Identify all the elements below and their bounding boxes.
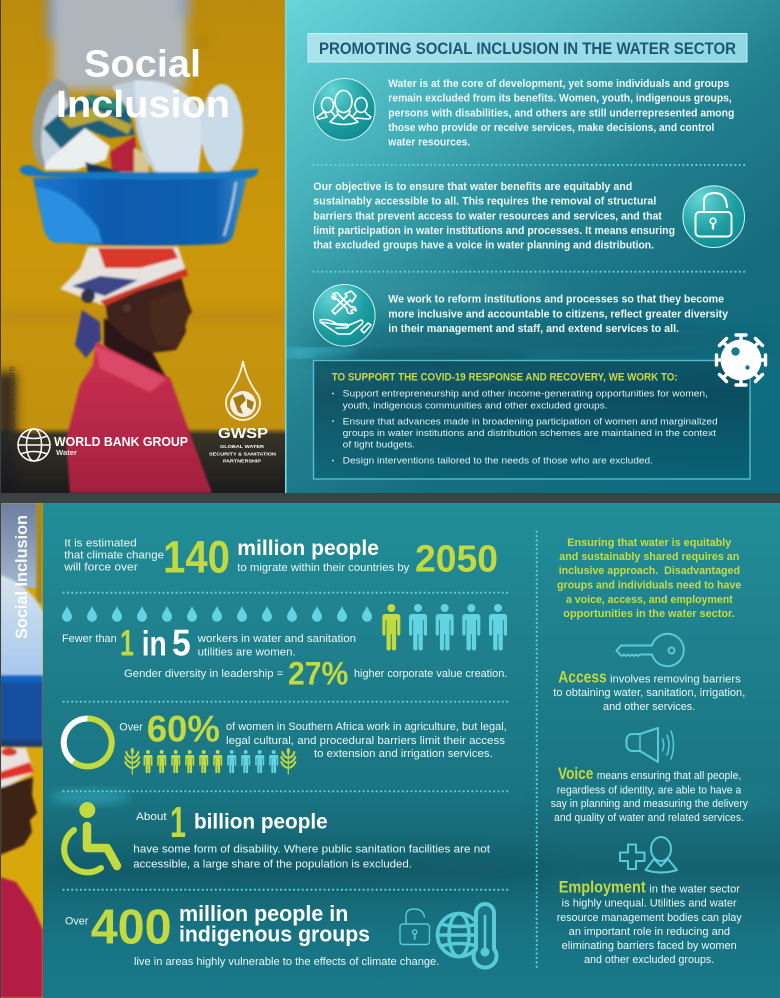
- text: ensuring water: inclusive approach. Disadvantaged: [559, 565, 740, 577]
- stat: 1 in 5: Fewer than: [62, 633, 117, 645]
- stat: 60 percent: 60%: [147, 709, 220, 750]
- icon: tools in hand: [314, 284, 375, 346]
- strip: cropped photo with vertical title: [0, 503, 43, 998]
- title: Social Inclusion: Inclusion: [56, 84, 230, 126]
- icon: plus and person: [620, 837, 677, 872]
- text: water is at the core: Water is at the core of development, yet some individuals and groups: [388, 78, 729, 90]
- white cup: [45, 128, 110, 170]
- text: reform institutions: more inclusive and accountable to citizens, reflect greater diversity: [388, 308, 728, 320]
- pictogram: 1 in 5 workers: [382, 604, 507, 650]
- stat: 1 billion people: [133, 798, 490, 870]
- stat: 400 million people: million people in: [179, 901, 348, 926]
- left plate: [30, 79, 72, 170]
- icon: open padlock: [683, 186, 744, 248]
- divider: vertical dots: [536, 532, 538, 971]
- icon: wheelchair: [64, 802, 117, 872]
- icon: megaphone: [626, 728, 674, 762]
- text: voice: and quality of water and related services.: [554, 812, 744, 824]
- text: public disclosure watermark: Public Disclosure: [7, 366, 18, 440]
- logo: GWSP: [209, 361, 277, 464]
- stat: 27 percent: 27%: [288, 655, 348, 691]
- stat: 1 billion people: billion people: [194, 810, 328, 833]
- callout: covid-19 response: Support entrepreneurship and other income-generating opportunities for women,: [343, 389, 708, 400]
- text: water is at the core: persons with disabilities, and others are still underrepresented among: [388, 107, 734, 119]
- title: Social Inclusion: [56, 44, 230, 126]
- stat: 140 million people: to migrate within their countries by: [237, 562, 410, 574]
- basin rim: [20, 165, 258, 180]
- donut chart: 60 percent: [64, 718, 112, 767]
- pictogram: wheat and women: [125, 748, 295, 774]
- logo: World Bank Group: Water: [56, 448, 77, 457]
- callout: covid-19 response: TO SUPPORT THE COVID-19 RESPONSE AND RECOVERY, WE WORK TO:: [332, 371, 678, 383]
- text: reform institutions: [388, 294, 728, 335]
- stat: 60 percent: [119, 709, 507, 760]
- stat: 400 million people: Over: [65, 915, 89, 927]
- stat: 60 percent: legal cultural, and procedural barriers limit their access: [226, 735, 506, 747]
- text: access: involves removing barriers: [610, 673, 741, 685]
- scarf tail: [75, 310, 101, 358]
- text: employment: eliminating barriers faced by women: [562, 940, 737, 952]
- stat: 140 million people: will force over: [63, 561, 138, 573]
- stat: 1 billion people: About: [136, 811, 167, 823]
- text: ensuring water: a voice, access, and employment: [566, 594, 733, 606]
- panel: promoting social inclusion: [278, 0, 780, 493]
- icon: key: [616, 634, 684, 666]
- stat: 1 in 5: 1: [120, 623, 134, 664]
- text: voice: say in planning and measuring the delivery: [551, 798, 749, 810]
- callout: covid-19 response: youth, indigenous communities and other excluded groups.: [343, 400, 608, 411]
- text: voice: regardless of identity, are able to have a: [557, 784, 741, 796]
- logo: GWSP: GWSP: [218, 425, 268, 442]
- stat: 1 billion people: accessible, a large share of the population is excluded.: [133, 858, 412, 870]
- text: voice: means ensuring that all people,: [597, 770, 741, 782]
- text: our objective: barriers that prevent access to water resources and services, and that: [313, 210, 662, 222]
- logo: GWSP: GLOBAL WATER: [220, 444, 265, 449]
- text: our objective: [313, 181, 675, 252]
- icon: group of people: [314, 78, 375, 140]
- logo: World Bank Group: WORLD BANK GROUP: [54, 434, 188, 449]
- stat: 400 million people: 400: [91, 900, 172, 954]
- text: employment: resource management bodies can play: [557, 912, 742, 924]
- text: water is at the core: remain excluded from its benefits. Women, youth, indigenous groups,: [388, 93, 732, 105]
- text: employment: an important role in reducing and: [569, 926, 730, 938]
- stat: 1 in 5: in: [142, 625, 167, 664]
- neck: [102, 317, 168, 378]
- text: voice: Voice: [558, 765, 593, 783]
- stat: 1 in 5: utilities are women.: [198, 647, 296, 659]
- icon: virus: [716, 335, 766, 385]
- right plate: [201, 84, 243, 174]
- text: voice: [551, 765, 749, 824]
- stat: 1 in 5: 5: [172, 623, 191, 664]
- text: ensuring water: opportunities in the water sector.: [563, 608, 735, 620]
- stat: 27 percent: [124, 655, 507, 691]
- text: our objective: that excluded groups have a voice in water planning and distribution.: [313, 240, 654, 252]
- text: employment: [557, 879, 742, 966]
- text: water is at the core: water resources.: [387, 137, 470, 149]
- text: our objective: Our objective is to ensure that water benefits are equitably and: [313, 181, 632, 193]
- stat: 1 billion people: 1: [170, 798, 186, 847]
- text: access: Access: [558, 668, 607, 686]
- dress: [66, 342, 212, 493]
- text: ensuring water: and sustainably shared requires an: [559, 551, 739, 563]
- text: employment: and other excluded groups.: [584, 954, 714, 966]
- icon: open lock: [400, 909, 430, 944]
- panel: cover photo: [0, 0, 285, 497]
- stat: 60 percent: to extension and irrigation services.: [314, 748, 493, 760]
- stat: 140 million people: 2050: [415, 539, 498, 581]
- strip: cropped photo with vertical title: Social Inclusion: [12, 515, 31, 639]
- text: employment: in the water sector: [649, 884, 740, 896]
- stat: 1 in 5: workers in water and sanitation: [197, 633, 356, 645]
- translucent bowl: [112, 81, 205, 173]
- text: water is at the core: those who provide or receive services, make decisions, and control: [388, 122, 714, 134]
- basin body: [33, 178, 247, 246]
- text: access: and other services.: [603, 701, 695, 713]
- headscarf: [60, 247, 188, 305]
- callout: covid-19 response: groups in water institutions and distribution schemes are maintained in the context: [343, 428, 716, 439]
- title: Social Inclusion: Social: [84, 44, 201, 86]
- text: water is at the core: [387, 78, 734, 149]
- heading banner: PROMOTING SOCIAL INCLUSION IN THE WATER SECTOR: [319, 40, 736, 58]
- stat: 1 billion people: have some form of disability. Where public sanitation facilities are not: [133, 844, 490, 856]
- logo: World Bank Group: [18, 429, 188, 461]
- stat: 140 million people: 140: [163, 531, 230, 582]
- panel: statistics: [40, 503, 780, 998]
- text: reform institutions: We work to reform institutions and processes so that they become: [388, 294, 724, 306]
- stat: 140 million people: [63, 531, 498, 582]
- text: ensuring water: [557, 537, 741, 620]
- callout: covid-19 response: [314, 360, 750, 479]
- stat: 400 million people: live in areas highly vulnerable to the effects of climate change.: [134, 956, 439, 968]
- stat: 140 million people: It is estimated: [64, 538, 137, 550]
- stat: 60 percent: of women in Southern Africa work in agriculture, but legal,: [226, 721, 507, 733]
- stat: 400 million people: [65, 900, 439, 968]
- colourful cloth: [43, 95, 135, 150]
- text: ensuring water: Ensuring that water is equitably: [567, 537, 731, 549]
- logo: GWSP: PARTNERSHIP: [223, 458, 261, 464]
- logo: GWSP: SECURITY & SANITATION: [209, 452, 277, 456]
- text: employment: Employment: [559, 879, 646, 897]
- text: ensuring water: groups and individuals need to have: [557, 580, 741, 592]
- text: our objective: limit participation in water institutions and processes. It means ensuring: [313, 225, 675, 237]
- text: access: [553, 668, 745, 713]
- text: employment: is highly unequal. Utilities and water: [562, 898, 737, 910]
- heading banner: [308, 34, 747, 62]
- head: [105, 272, 192, 353]
- icon: globe and thermometer: [438, 904, 496, 968]
- text: our objective: sustainably accessible to all. This requires the removal of structural: [313, 196, 656, 208]
- knot: [81, 289, 95, 303]
- icon row: water drops: [62, 606, 372, 622]
- stat: 140 million people: million people: [237, 537, 379, 560]
- text: access: to obtaining water, sanitation, irrigation,: [553, 687, 745, 699]
- stat: 27 percent: higher corporate value creation.: [354, 668, 507, 680]
- stat: 140 million people: that climate change: [64, 550, 164, 562]
- dark foot gradient: [0, 428, 285, 493]
- stat: 60 percent: Over: [119, 721, 143, 733]
- stat: 400 million people: indigenous groups: [179, 922, 370, 947]
- callout: covid-19 response: of tight budgets.: [343, 440, 415, 451]
- callout: covid-19 response: Design interventions tailored to the needs of those who are excluded.: [343, 456, 653, 467]
- callout: covid-19 response: Ensure that advances made in broadening participation of women and marginalized: [343, 416, 718, 427]
- stat: 1 in 5: [62, 623, 356, 664]
- text: reform institutions: in their management and staff, and extend services to all.: [388, 323, 679, 335]
- stat: 27 percent: Gender diversity in leadership =: [124, 668, 283, 680]
